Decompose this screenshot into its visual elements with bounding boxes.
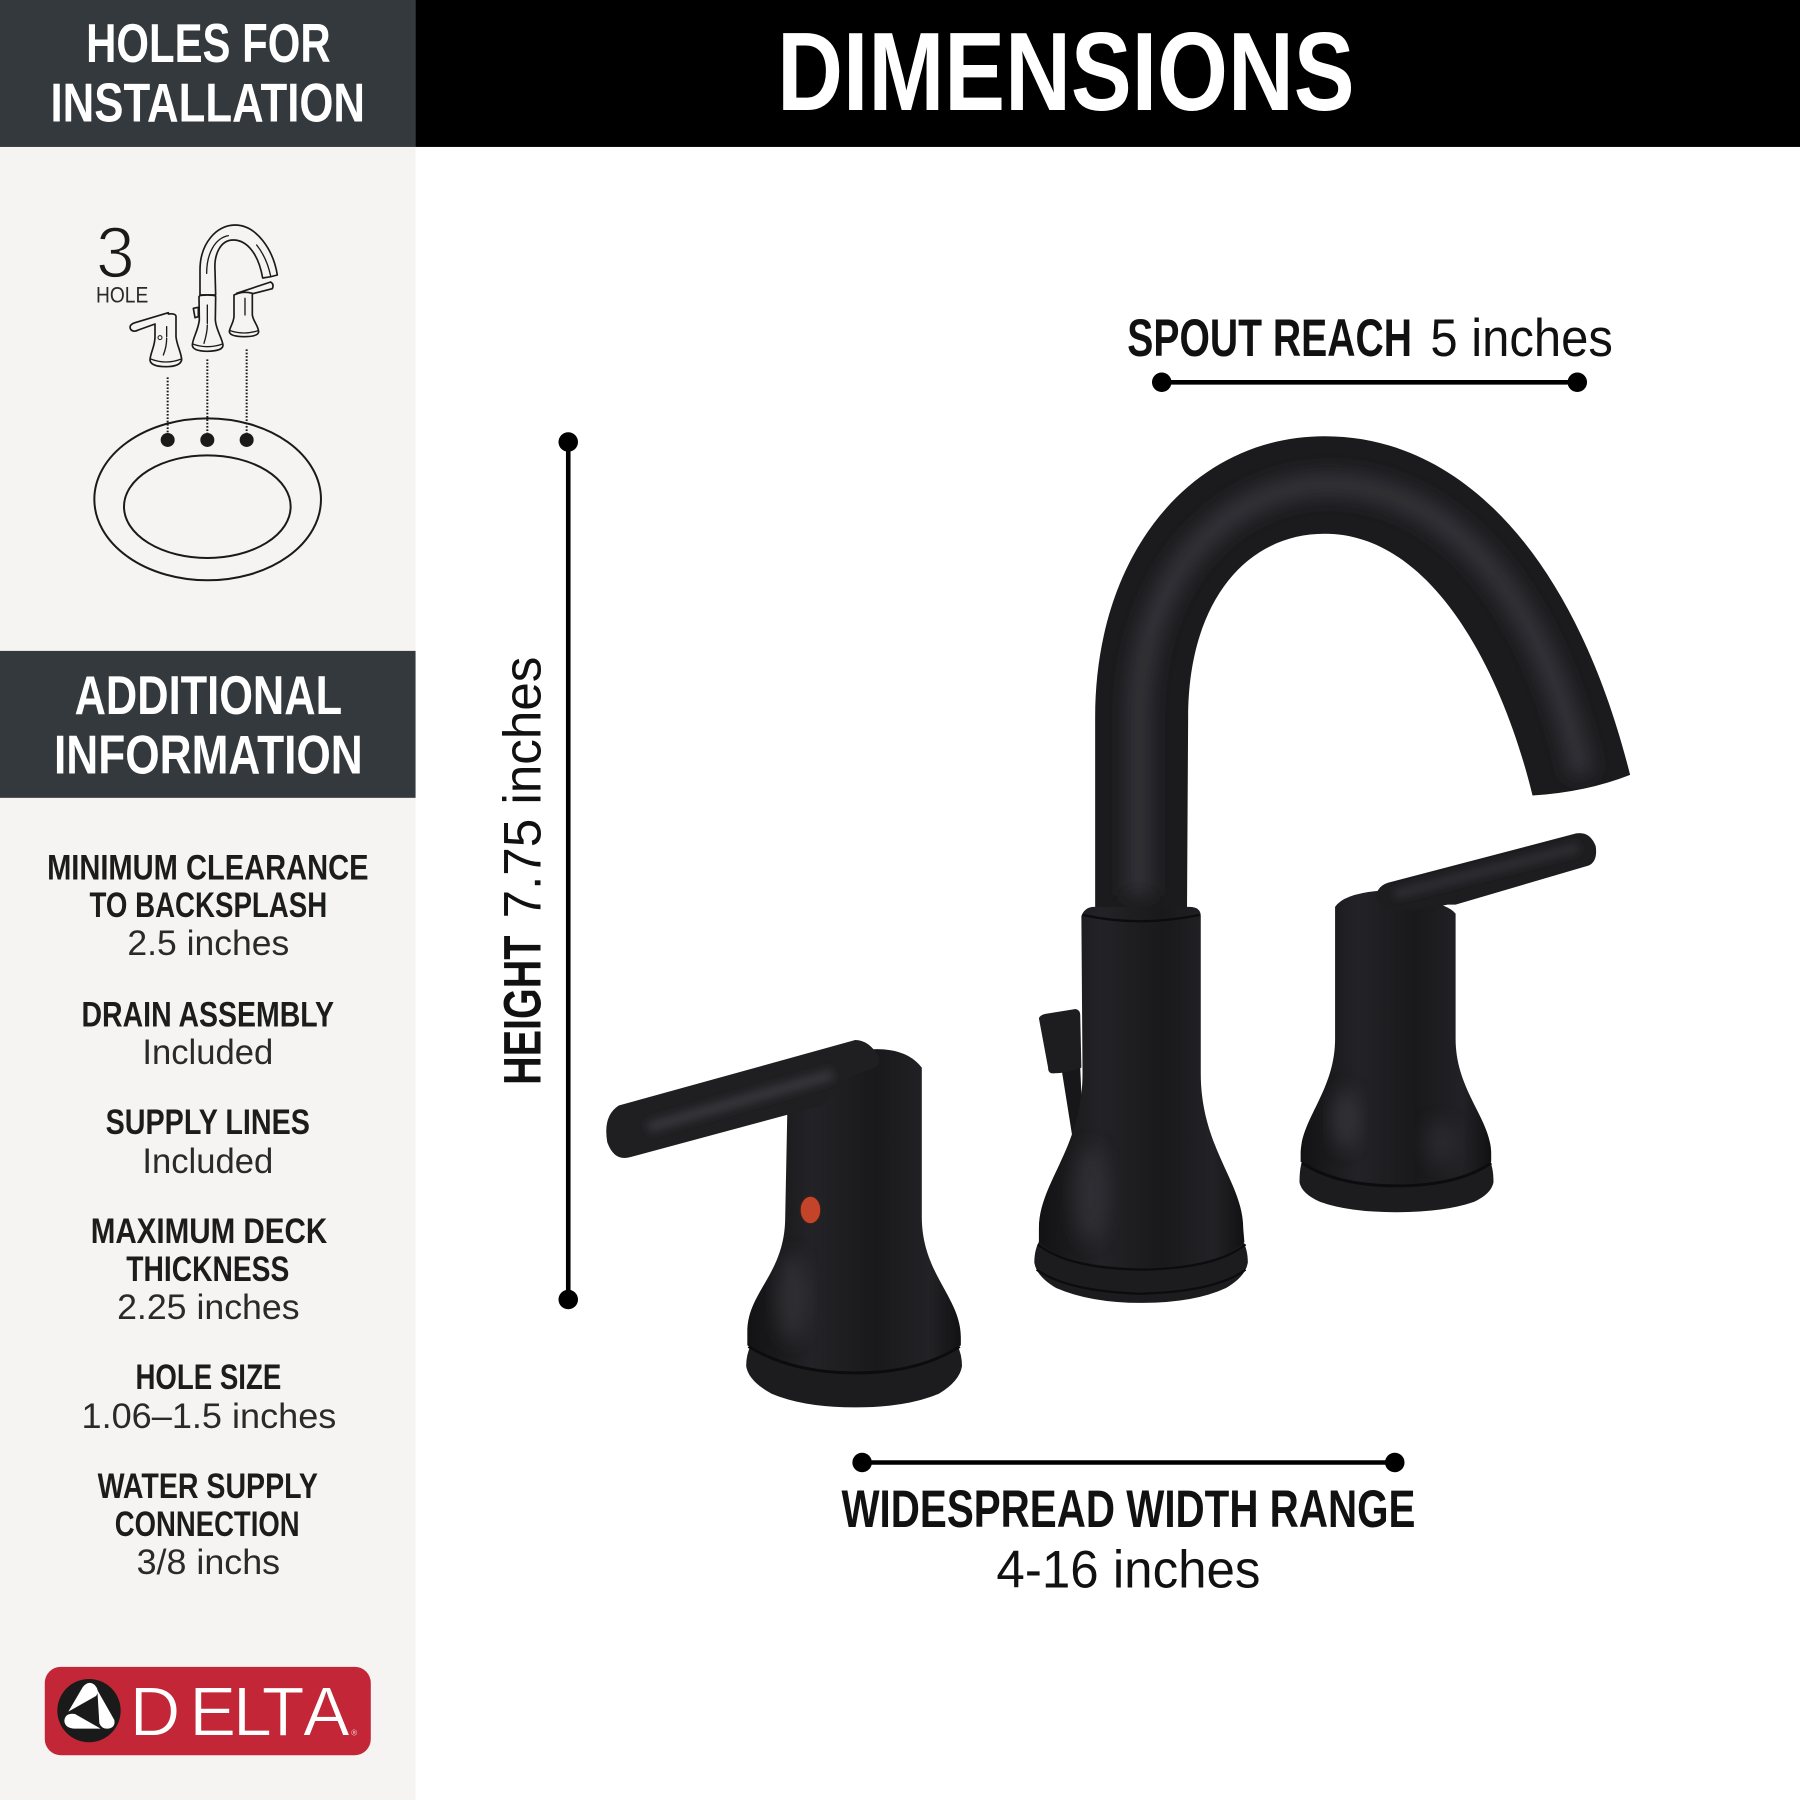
text block: maximum deck thickness: 2.25 inches	[117, 1287, 300, 1327]
text block: supply lines: Included	[142, 1141, 273, 1181]
text block: hole size: HOLE SIZE	[135, 1357, 281, 1397]
text block: supply lines	[106, 1102, 310, 1181]
dimension: spout reach: 5 inches	[1430, 309, 1613, 368]
faucet: left hot handle	[606, 1040, 962, 1407]
heading: holes for installation	[0, 0, 416, 147]
text block: water supply connection	[98, 1466, 318, 1582]
text block: drain assembly	[82, 994, 334, 1072]
dimension: spout reach: SPOUT REACH	[1127, 309, 1412, 368]
faucet: red hot indicator	[800, 1196, 821, 1224]
icon: sink basin	[94, 349, 321, 580]
label: 3 hole	[96, 212, 148, 308]
faucet: drain lift rod	[1039, 1009, 1083, 1150]
text block: drain assembly: DRAIN ASSEMBLY	[82, 994, 334, 1034]
label: 3 hole: 3	[96, 212, 135, 293]
logo: delta: ®	[351, 1729, 357, 1738]
text block: maximum deck thickness	[91, 1211, 327, 1327]
dimension: height: HEIGHT	[494, 936, 553, 1085]
text block: maximum deck thickness: MAXIMUM DECK	[91, 1211, 327, 1251]
heading: additional information	[0, 651, 416, 798]
text block: minimum clearance to backsplash: MINIMUM CLEARANCE	[47, 847, 368, 887]
text block: water supply connection: CONNECTION	[115, 1504, 300, 1544]
dimension: widespread width range: 4-16 inches	[996, 1541, 1260, 1600]
logo: delta	[45, 1667, 371, 1755]
text block: water supply connection: WATER SUPPLY	[98, 1466, 318, 1506]
text block: drain assembly: Included	[142, 1032, 273, 1072]
text block: minimum clearance to backsplash: TO BACKSPLASH	[90, 885, 327, 925]
heading: dimensions: DIMENSIONS	[777, 9, 1355, 134]
faucet: center spout	[1095, 436, 1630, 913]
text block: hole size	[82, 1357, 336, 1436]
text block: supply lines: SUPPLY LINES	[106, 1102, 310, 1142]
logo: delta: DELTA	[130, 1673, 350, 1751]
text block: water supply connection: 3/8 inchs	[137, 1542, 280, 1582]
dimension: height: 7.75 inches	[494, 657, 553, 918]
heading: additional information: INFORMATION	[54, 724, 363, 786]
text block: maximum deck thickness: THICKNESS	[126, 1249, 289, 1289]
faucet: center body and base	[1034, 907, 1248, 1303]
panel: left sidebar	[0, 0, 416, 1800]
heading: additional information: ADDITIONAL	[75, 664, 342, 726]
icon: delta triangle mark	[57, 1679, 121, 1742]
heading: holes for installation: HOLES FOR	[86, 12, 331, 74]
label: 3 hole: HOLE	[96, 283, 148, 308]
heading: dimensions	[416, 0, 1800, 147]
dimension: height	[494, 432, 578, 1309]
faucet: right cold handle	[1299, 833, 1596, 1212]
faucet illustration	[606, 436, 1630, 1407]
icon: outline faucet	[130, 225, 277, 367]
text block: minimum clearance to backsplash	[47, 847, 368, 963]
dimension: spout reach	[1127, 309, 1613, 392]
dimension: widespread width range: WIDESPREAD WIDTH RANGE	[841, 1480, 1415, 1539]
icon: 3 hole sink diagram	[94, 212, 321, 580]
heading: holes for installation: INSTALLATION	[51, 72, 365, 134]
text block: minimum clearance to backsplash: 2.5 inches	[127, 923, 289, 963]
dimension: widespread width range	[841, 1453, 1415, 1600]
text block: hole size: 1.06–1.5 inches	[82, 1396, 336, 1436]
